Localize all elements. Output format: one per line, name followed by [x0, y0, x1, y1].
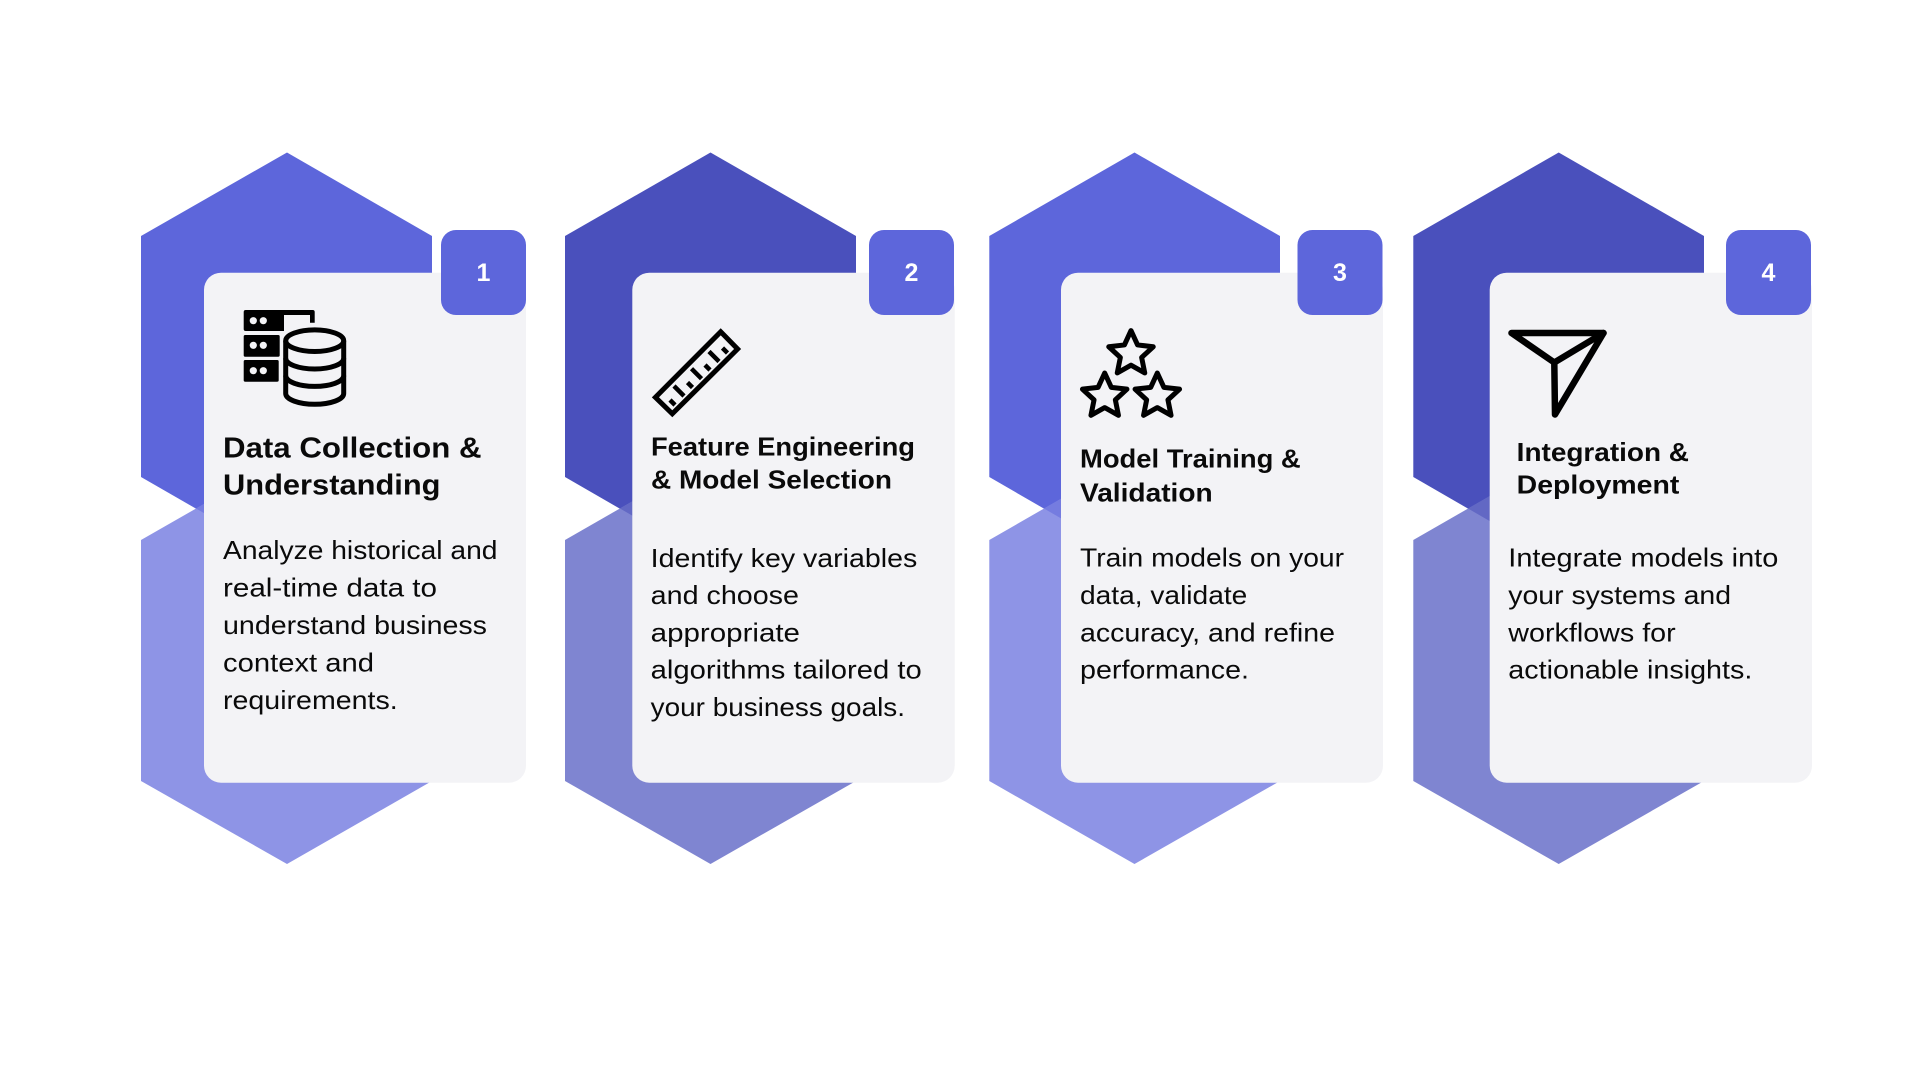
text block: step 1: context and: [223, 648, 374, 678]
text block: step 3: Train models on your: [1080, 543, 1344, 573]
text block: step 1: Analyze historical and: [223, 535, 498, 565]
hexagon: step 2 lower: [565, 456, 856, 864]
icon: three stars: [1082, 331, 1180, 415]
hexagon overlap: step 1: [196, 456, 378, 561]
panel: step 3 model training: [989, 152, 1383, 864]
hexagon overlap: step 2: [620, 456, 801, 561]
badge: number 3: 3: [1333, 259, 1347, 287]
text block: step 3: accuracy, and refine: [1080, 618, 1335, 648]
text block: step 2: [651, 543, 922, 722]
heading: step 1: [223, 433, 482, 501]
badge: number 4: [1726, 230, 1811, 315]
card: step 2: [632, 273, 955, 783]
hexagon: step 1 upper: [141, 152, 432, 561]
hexagon: step 1 lower: [141, 456, 432, 864]
text block: step 4: Integrate models into: [1508, 543, 1778, 573]
text block: step 3: [1080, 543, 1344, 685]
heading: step 2: [651, 432, 915, 495]
hexagon: step 3 upper: [989, 152, 1280, 561]
panel: step 1 data collection: [141, 152, 526, 864]
hexagon: step 4 lower: [1413, 456, 1704, 864]
text block: step 1: requirements.: [223, 685, 398, 715]
heading: step 4: Deployment: [1517, 469, 1680, 499]
hexagon overlap: step 3: [1044, 456, 1225, 561]
heading: step 1: Understanding: [223, 469, 440, 501]
icon: server and database: [244, 310, 344, 404]
badge: number 4: 4: [1762, 259, 1776, 287]
badge: number 2: [869, 230, 954, 315]
hexagon: step 4 upper: [1413, 152, 1704, 561]
hexagon: step 2 upper: [565, 152, 856, 561]
hexagon overlap: step 4: [1468, 456, 1649, 561]
heading: step 4: [1517, 437, 1689, 499]
icon: paper plane: [1512, 333, 1604, 414]
text block: step 3: data, validate: [1080, 580, 1247, 610]
text block: step 4: actionable insights.: [1508, 655, 1752, 685]
heading: step 4: Integration &: [1517, 437, 1689, 467]
text block: step 2: your business goals.: [651, 692, 905, 722]
heading: step 3: [1080, 443, 1301, 508]
heading: step 3: Validation: [1080, 478, 1213, 508]
card: step 1: [204, 273, 526, 783]
hexagon: step 3 lower: [989, 456, 1280, 864]
text block: step 2: Identify key variables: [651, 543, 917, 573]
text block: step 1: [223, 535, 498, 715]
badge: number 2: 2: [905, 259, 918, 287]
icon: ruler: [655, 332, 738, 414]
badge: number 1: [441, 230, 526, 315]
heading: step 3: Model Training &: [1080, 443, 1301, 473]
text block: step 2: and choose: [651, 580, 799, 610]
text block: step 2: appropriate: [651, 618, 800, 648]
card: step 4: [1490, 273, 1812, 783]
heading: step 2: Feature Engineering: [651, 432, 915, 462]
card: step 3: [1061, 273, 1383, 783]
badge: number 1: 1: [477, 259, 491, 287]
text block: step 4: [1507, 543, 1778, 685]
badge: number 3: [1298, 230, 1382, 315]
text block: step 4: workflows for: [1507, 618, 1676, 648]
text block: step 1: understand business: [223, 610, 487, 640]
text block: step 2: algorithms tailored to: [651, 655, 922, 685]
text block: step 4: your systems and: [1508, 580, 1731, 610]
panel: step 4 integration: [1413, 152, 1812, 864]
panel: step 2 feature engineering: [565, 152, 955, 864]
heading: step 2: & Model Selection: [651, 465, 892, 495]
text block: step 1: real-time data to: [223, 573, 437, 603]
heading: step 1: Data Collection &: [223, 433, 482, 465]
text block: step 3: performance.: [1080, 655, 1249, 685]
